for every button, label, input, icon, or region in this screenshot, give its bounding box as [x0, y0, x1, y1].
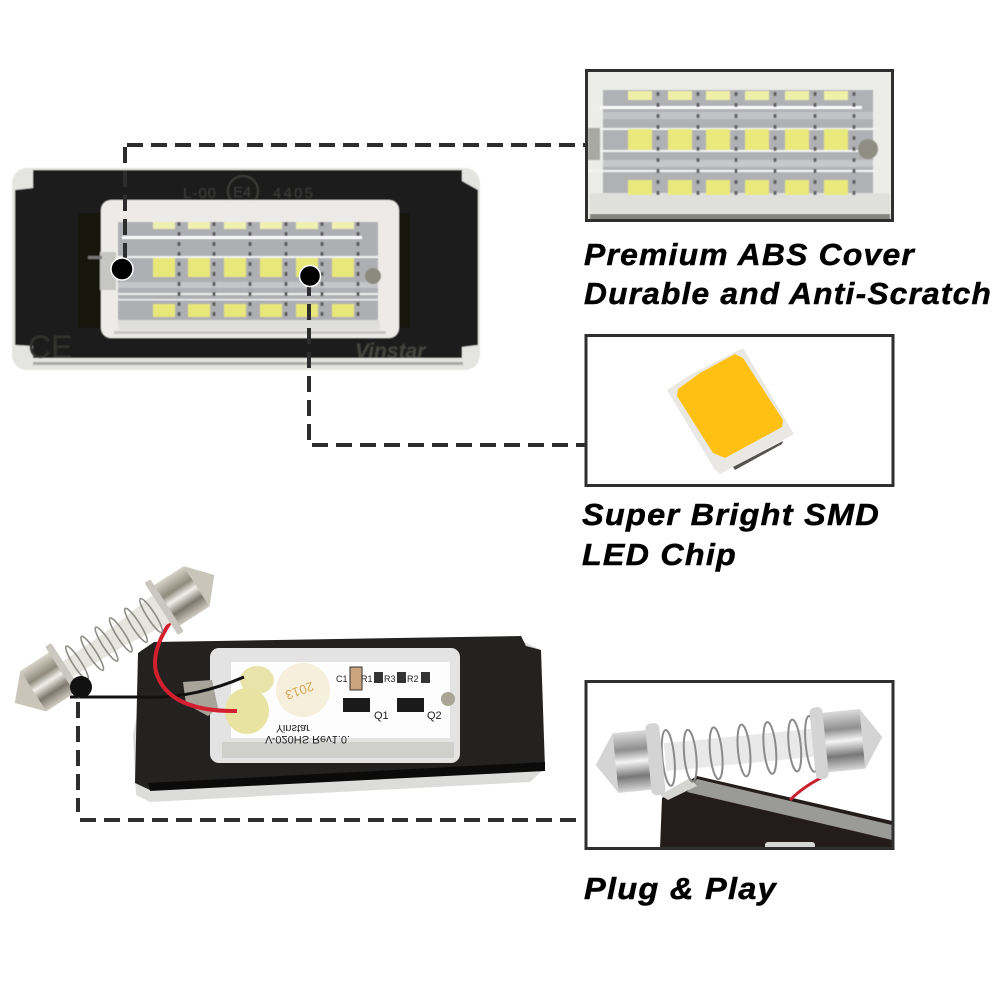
- caption: premium ABS cover: [584, 237, 992, 311]
- clear cover: [101, 200, 399, 338]
- recess around cover: [78, 213, 410, 328]
- resistors and components: R1: [361, 674, 373, 684]
- dot marker: LED: [300, 266, 320, 286]
- caption: SMD LED chip: Super Bright SMD: [582, 497, 880, 532]
- board print: [265, 722, 350, 745]
- resistors and components: C1: [336, 674, 348, 684]
- panel: ABS cover close-up: [586, 70, 892, 220]
- red wire: [155, 608, 237, 711]
- plate moulded markings: L-00: [183, 185, 216, 202]
- plate moulded markings: [28, 176, 427, 365]
- plate moulded markings: E4: [233, 184, 251, 201]
- caption: SMD LED chip: LED Chip: [582, 537, 737, 572]
- grey LED board: [603, 90, 873, 193]
- dashed connector: LED chip: [309, 280, 585, 445]
- resistors and components: R2: [407, 674, 419, 684]
- icon: bulb close-up: [592, 701, 886, 801]
- black wire: [70, 677, 244, 697]
- plate moulded markings: 4405: [273, 185, 313, 202]
- caption: premium ABS cover: Premium ABS Cover: [584, 237, 916, 272]
- white circuit board: [231, 662, 450, 738]
- board print: V-020HS Rev1.0.: [265, 733, 350, 745]
- icon: SMD chip: [667, 348, 794, 474]
- date sticker: [276, 663, 330, 717]
- dot marker: cover: [111, 258, 133, 280]
- icon: festoon bulb: [0, 549, 231, 729]
- clear cover: [210, 648, 460, 763]
- photo: back of light with festoon bulb: [70, 608, 545, 802]
- caption: premium ABS cover: Durable and Anti-Scratch: [584, 276, 992, 311]
- photo: licence plate light front: [12, 168, 480, 370]
- screw: [441, 692, 455, 706]
- chip rows: [628, 91, 848, 195]
- dot marker: bulb: [70, 676, 92, 698]
- black gasket: [135, 636, 545, 790]
- glue blob: [240, 666, 274, 694]
- resistors and components: R3: [384, 674, 396, 684]
- resistors and components: Q1: [374, 710, 389, 722]
- metal clip: [183, 680, 218, 716]
- panel: plug and play close-up: [586, 682, 893, 849]
- caption: plug and play: Plug & Play: [584, 871, 778, 906]
- board print: Yinstar: [276, 722, 310, 734]
- plate body: [12, 168, 480, 370]
- screw: [365, 268, 381, 284]
- clear base: [133, 640, 543, 802]
- LED panel: [118, 222, 378, 320]
- caption: SMD LED chip: [582, 497, 880, 572]
- date sticker: 2013: [283, 679, 316, 703]
- plate moulded markings: Vinstar: [355, 340, 427, 363]
- plate corner: [660, 776, 892, 849]
- LED terminals: [179, 222, 358, 318]
- dashed connector: plug and play: [78, 702, 580, 820]
- screw: [858, 139, 878, 159]
- plate moulded markings: CE: [28, 329, 72, 365]
- resistors and components: Q2: [427, 710, 442, 722]
- resistors and components: [336, 667, 442, 722]
- dashed connector: cover: [125, 145, 585, 269]
- LED terminals: [658, 92, 854, 195]
- red wire: [790, 775, 827, 800]
- LED chips: [153, 222, 354, 317]
- panel: SMD LED chip: [586, 336, 893, 486]
